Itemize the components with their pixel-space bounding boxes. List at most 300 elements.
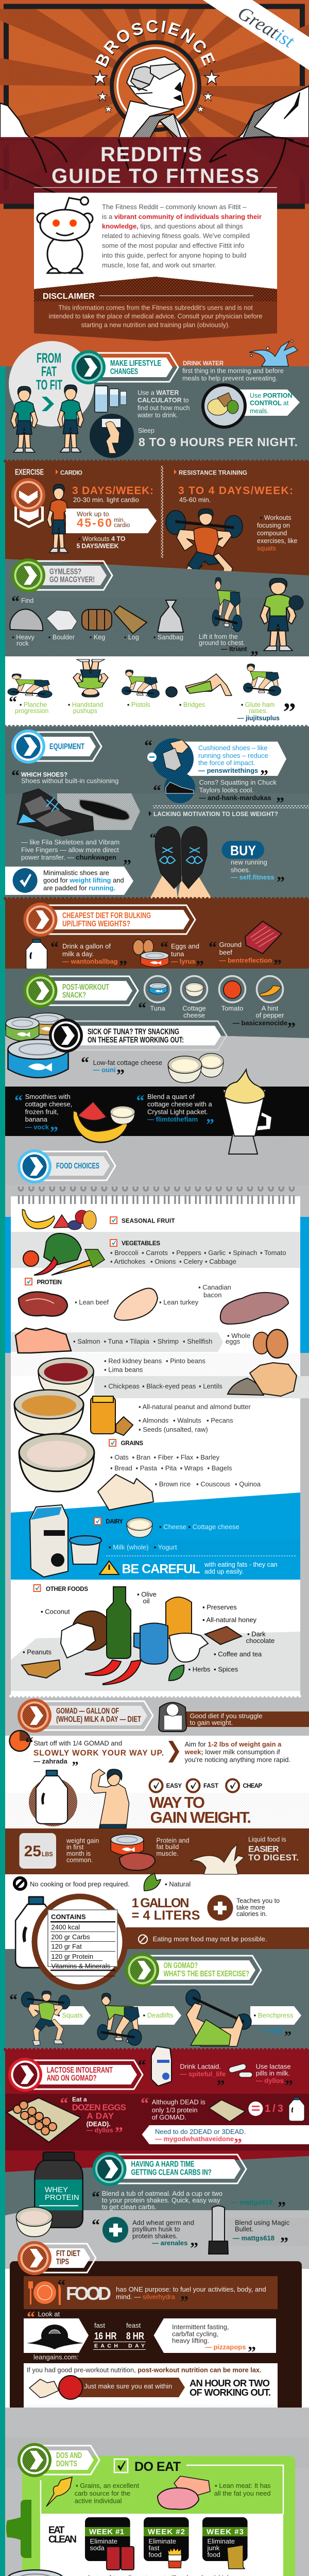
vegetables: ▪ Cabbage [205, 1258, 236, 1265]
quote: lactase pills: — dyllos [256, 2077, 284, 2084]
section: gymless [5, 558, 309, 666]
legumes text: ▪ Red kidney beans [104, 1357, 162, 1365]
week 2: fast [148, 2544, 160, 2552]
quote: wheat germ: “ [92, 2215, 100, 2234]
fila text: — like Fila Skeletoes and Vibram [21, 838, 119, 846]
section: dos and don'ts [5, 2408, 309, 2576]
callout: intermittent fasting: heavy lifting. [172, 2336, 209, 2344]
icon: whey tub: PROTEIN [45, 2193, 79, 2202]
fast feast: EACH [94, 2343, 118, 2349]
teaches you: calories in. [236, 1910, 267, 1918]
seafood row: ▪ Shellfish [183, 1337, 212, 1345]
cardio details: 20-30 min. light cardio [73, 496, 139, 504]
grains: ▪ Quinoa [235, 1480, 261, 1488]
exercise options: ▪ Squats [58, 2011, 83, 2019]
quote: smoothies: “ [14, 1091, 23, 1110]
icon: coconut [61, 1611, 111, 1658]
quote: low-fat cottage cheese: ” [116, 1065, 125, 1084]
icon: kettlebell figure [260, 579, 303, 651]
cushioned callout: ” [260, 766, 268, 785]
band: 25 lbs: TO DIGEST. [248, 1853, 299, 1862]
quote: lactaid: Drink Lactaid. [180, 2063, 221, 2071]
quote: dead is a third: Although DEAD is [152, 2098, 205, 2106]
portion control [203, 385, 300, 427]
other foods labels: ▪ Preserves [202, 1603, 237, 1611]
legumes text: ▪ Black-eyed peas [142, 1382, 196, 1390]
icon: rock [10, 609, 43, 631]
eat clean: CLEAN [48, 2534, 77, 2545]
icon: blender [223, 1070, 272, 1154]
quote: lift: — Itriant [221, 646, 248, 653]
seafood row: ▪ Shrimp [153, 1337, 179, 1345]
quote: crystal light: — flimtotheflam [147, 1115, 198, 1123]
greatist ribbon [203, 0, 309, 70]
vegetables: ▪ Onions [150, 1258, 176, 1265]
band: 25 lbs: in first [66, 1843, 84, 1851]
quote: dozen eggs: DOZEN EGGS [72, 2103, 126, 2112]
quote: ground beef: ” [273, 956, 282, 974]
other foods labels: ▪ Peanuts [23, 1648, 52, 1656]
grains do: ▪ Grains, an excellent [76, 2482, 140, 2489]
resistance details: squats [257, 545, 276, 552]
vegetables [23, 1233, 286, 1275]
exercise labels [15, 468, 247, 477]
quote: slowly work up: SLOWLY WORK YOUR WAY UP. [33, 1749, 164, 1757]
nutrition label magnifier: 200 gr Carbs [52, 1933, 90, 1941]
header poster [0, 0, 309, 366]
snack labels: Tomato [221, 1005, 243, 1012]
greatist ribbon: Greatist [234, 3, 299, 53]
fast feast: DAY [128, 2343, 145, 2349]
cardio details: ▪ Workouts 4 TO [78, 535, 126, 543]
quote: slowly work up: Start off with 1/4 GOMAD and [33, 1739, 122, 1747]
icon: nuts [228, 1363, 297, 1396]
gear labels: ▪ Boulder [48, 634, 75, 641]
quote: crystal light: Crystal Light packet. [147, 1108, 208, 1116]
dairy: ▪ Yogurt [153, 1544, 177, 1551]
quote: magic bullet: Bullet. [235, 2225, 253, 2233]
water calculator text: water to drink. [137, 412, 178, 419]
be careful warning: add up easily. [204, 1568, 244, 1575]
cardio details: Work up to [77, 510, 109, 518]
legumes text: ▪ Lima beans [104, 1366, 143, 1374]
quote: wheat germ: psyllium husk to [132, 2225, 180, 2233]
snack labels [138, 998, 296, 1037]
heading: best exercise: WHAT'S THE BEST EXERCISE? [164, 1970, 249, 1978]
other foods: OTHER FOODS [46, 1586, 88, 1592]
fast feast [93, 2321, 146, 2350]
icon: peppers [85, 1660, 141, 1685]
heading: dos and donts: DOS AND [56, 2451, 82, 2460]
banner: good diet [159, 1702, 309, 1732]
water calculator text: CALCULATOR to [138, 397, 189, 404]
dark arm outlines [0, 137, 309, 204]
quote: magic bullet: ” [280, 2233, 288, 2252]
cushioned callout [144, 736, 286, 785]
way to gain weight: GAIN WEIGHT. [150, 1808, 251, 1826]
stars [92, 70, 219, 112]
quote: smoothies: frozen fruit, [25, 1108, 59, 1116]
title circle [9, 341, 94, 427]
protein [19, 1278, 288, 1324]
quote: wheat germ: ” [190, 2239, 198, 2257]
seasonal fruit [22, 1210, 175, 1230]
heading: fit diet: TIPS [56, 2258, 69, 2266]
section: sick of tuna [5, 1013, 309, 1217]
grains: ▪ Bagels [207, 1464, 232, 1472]
minimalist callout [5, 867, 133, 895]
intro text: knowledge, tips, and questions about all things [102, 223, 243, 230]
snack labels: ” [287, 1019, 296, 1037]
icon: bread [29, 2379, 59, 2398]
heading: gymless [11, 558, 112, 592]
disclaimer: DISCLAIMER [43, 292, 95, 301]
fast feast: 16 HR [94, 2331, 117, 2342]
eat clean [48, 2525, 77, 2545]
band: 25 lbs: month is [66, 1850, 91, 1857]
cardio details: 45-60 [77, 516, 112, 530]
quote: magic bullet: — mattgs618 [233, 2234, 274, 2242]
quote: crystal light: “ [136, 1091, 144, 1110]
heading: sick of tuna: ON THESE AFTER WORKING OUT: [88, 1036, 184, 1045]
snack labels: Cottage [182, 1005, 206, 1012]
quote: smoothies: cottage cheese, [25, 1100, 72, 1108]
resistance details: 45-60 min. [179, 496, 211, 504]
band: eating more food [126, 1927, 309, 1950]
quote: wheat germ: Add wheat germ and [132, 2218, 194, 2227]
bodyweight labels: “ [9, 692, 17, 711]
cardio details: cardio [114, 522, 130, 529]
nutrition label magnifier: Vitamins & Minerals [52, 1962, 111, 1970]
quote: dead is a third: “ [141, 2094, 149, 2112]
fast feast: fast [94, 2321, 105, 2329]
quote: lift [199, 633, 259, 666]
bowls [14, 1358, 94, 1492]
other foods labels: oil [143, 1597, 150, 1605]
band: food purpose: “ [57, 2276, 65, 2294]
fila text [21, 838, 131, 874]
bodyweight labels: ▪ Glute ham [241, 701, 275, 708]
intro text [102, 203, 262, 269]
chuck taylors quote: — and-hank-mardukas [199, 794, 271, 802]
grains: ▪ Pasta [136, 1464, 158, 1472]
band: 25 lbs: LBS [42, 1851, 53, 1858]
nutrition label magnifier [35, 1896, 125, 1987]
section: fit diet tips [5, 2241, 309, 2437]
week 3: junk [207, 2544, 220, 2552]
be careful warning: with eating fats - they can [204, 1561, 278, 1568]
heading: best exercise [125, 1953, 261, 1987]
minimalist callout: are padded for running. [43, 884, 115, 892]
bodyweight labels: ▪ Planche [20, 701, 47, 708]
dairy [30, 1505, 297, 1577]
quote: smoothies: — vock [25, 1123, 49, 1131]
cushioned callout: “ [144, 736, 152, 755]
nuts text: ▪ Seeds (unsalted, raw) [139, 1426, 208, 1433]
portion control: meals. [250, 408, 269, 415]
heading: fit diet: FIT DIET [56, 2249, 80, 2258]
band: 25 lbs: fat build [157, 1843, 179, 1851]
quote: lift: ground to chest. [199, 639, 245, 647]
quote: ground beef: Ground [219, 941, 242, 948]
bodyweight labels: — jiujitsuplus [237, 715, 280, 722]
resistance details: 3 TO 4 DAYS/WEEK: [178, 485, 293, 497]
section: cheapest diet [5, 899, 309, 975]
week 1: Eliminate [90, 2537, 117, 2545]
icon: planche [8, 674, 52, 698]
section: gomad heading: (WHOLE) MILK A DAY — DIET [56, 1715, 141, 1724]
disclaimer: This information comes from the Fitness subreddit's users and is not [58, 304, 253, 311]
water calculator text [137, 389, 190, 419]
section: from fat to fit [5, 340, 309, 461]
heading: sick of tuna [49, 1019, 227, 1053]
nutrition label magnifier: CONTAINS [51, 1913, 86, 1921]
icon: log [114, 606, 147, 634]
aim text: you're noticing anything more rapid. [185, 1756, 290, 1764]
section: exercise [5, 461, 309, 595]
heading: lactose: LACTOSE INTOLERANT [47, 2066, 113, 2075]
quote: oatmeal [92, 2188, 286, 2216]
other foods labels: ▪ Spices [214, 1665, 238, 1673]
week 1 [85, 2517, 134, 2570]
grains do: active individual [75, 2497, 122, 2505]
seafood row: ▪ Whole [227, 1332, 250, 1340]
lean meat do: ▪ Lean meat: It has [215, 2482, 271, 2489]
heading: equipment [11, 730, 101, 764]
other foods labels: ▪ Coconut [41, 1607, 70, 1616]
lean meat do: all the fat you need [214, 2489, 270, 2497]
icon: squat [21, 1991, 70, 2046]
water calculator text: Use a WATER [138, 389, 179, 397]
bodyweight labels [9, 692, 296, 726]
bodyweight labels: ▪ Bridges [179, 701, 205, 708]
quote: milk: — wantonballbag [62, 958, 118, 965]
icon: boulder [46, 610, 77, 631]
section: lactose [5, 2046, 309, 2172]
one gallon: = 4 LITERS [132, 1908, 200, 1923]
legumes text [104, 1357, 222, 1390]
icon: jug with hatch [29, 1770, 77, 1826]
icon: pistols [122, 670, 159, 698]
which shoes text: “ [11, 766, 20, 785]
title circle: TO FIT [36, 377, 62, 393]
icon: honey jar [166, 1597, 192, 1638]
icon: water splash [249, 340, 298, 366]
dairy: ▪ Cottage cheese [188, 1523, 239, 1531]
sleep text [138, 427, 298, 449]
one gallon [132, 1896, 200, 1923]
icon: sleeping man [90, 414, 134, 458]
band: 25 lbs: EASIER [248, 1844, 279, 1854]
seafood row: ▪ Salmon [73, 1337, 100, 1345]
cushioned callout: the force of impact. [198, 759, 255, 767]
icon: handstand [73, 659, 108, 697]
section: gomad exercises [5, 1896, 309, 2049]
quote: crystal light: ” [206, 1115, 214, 1133]
protein: bacon [203, 1291, 221, 1299]
gear labels: rock [16, 640, 29, 647]
dairy: DAIRY [106, 1519, 123, 1525]
leangains: “ [27, 2308, 35, 2326]
intro text: related to achieving fitness goals. We've compiled [102, 232, 250, 240]
callout: 2dead: Need to do 2DEAD or 3DEAD. [155, 2128, 246, 2136]
quote: crystal light: Blend a quart of [147, 1093, 195, 1100]
band: 25 lbs: muscle. [157, 1850, 179, 1857]
icon: tuna and chicken [7, 2570, 85, 2576]
emblem ring [112, 42, 199, 130]
snack labels: A hint [262, 1005, 279, 1012]
icon: deadlift [97, 1993, 142, 2045]
icon: magic bullet [209, 2206, 228, 2254]
heading: make lifestyle changes: CHANGES [110, 367, 138, 376]
quote: lactaid [138, 2046, 226, 2095]
other foods labels: ▪ Coffee and tea [214, 1650, 262, 1658]
band: food purpose: ” [180, 2292, 188, 2311]
eat clean: EAT [48, 2525, 65, 2536]
quote: crystal light: cottage cheese with a [147, 1100, 213, 1108]
protein: PROTEIN [37, 1280, 62, 1286]
nuts text: ▪ Pecans [207, 1417, 233, 1425]
no cooking [14, 1878, 130, 1889]
quote: eggs and tuna: “ [160, 938, 168, 956]
quote: oatmeal: — mattgs618 [231, 2198, 272, 2206]
quote: dozen eggs: Eat a [72, 2096, 87, 2103]
quote: find: “ [11, 592, 20, 611]
which shoes text: Shoes without built-in cushioning [21, 777, 118, 785]
white panel: pre-workout: AN HOUR OR TWO [190, 2378, 270, 2388]
grains [98, 1439, 261, 1510]
quote: eggs and tuna: tuna [171, 950, 184, 958]
banner: good diet: Good diet if you struggle [190, 1712, 262, 1720]
vegetables: ▪ Peppers [172, 1249, 201, 1257]
quote: lactase pills: Use lactase [256, 2063, 291, 2071]
vegetables: ▪ Garlic [204, 1249, 226, 1257]
quote: dozen eggs: (DEAD). [87, 2121, 111, 2128]
band: 25 lbs: 25 [24, 1843, 41, 1860]
resistance details: focusing on [257, 522, 290, 529]
quote: dead is a third: only 1/3 protein [152, 2106, 198, 2114]
quote: smoothies: banana [25, 1115, 48, 1123]
heading: best exercise: ON GOMAD? [164, 1961, 198, 1970]
week 3: WEEK #3 [207, 2528, 244, 2536]
quote: eggs and tuna: — lyrus [171, 958, 196, 965]
way to gain weight [149, 1793, 251, 1826]
do eat title: DO EAT [134, 2460, 181, 2474]
bodyweight labels: progression [15, 707, 48, 715]
heading: clean carbs: HAVING A HARD TIME [131, 2160, 195, 2169]
heading: gymless: GYMLESS? [49, 568, 81, 576]
chuck taylors quote: ” [276, 793, 284, 812]
callout: intermittent fasting: — pizzapops [205, 2343, 246, 2351]
buy new shoes: shoes. [231, 866, 250, 874]
grains do [46, 2477, 140, 2506]
icon: tuna and steak [111, 1834, 155, 1870]
cushioned callout: running shoes – reduce [198, 752, 268, 759]
icon: running shoes top view [149, 826, 212, 899]
resistance details: exercises, like [257, 537, 298, 545]
other foods labels: ▪ Herbs [188, 1665, 211, 1673]
buy new shoes: ” [277, 873, 285, 891]
other foods labels [23, 1590, 274, 1673]
be careful warning [99, 1561, 278, 1577]
icon: runner [47, 484, 71, 552]
icon: bench [186, 1990, 251, 2046]
cardio details: 5 DAYS/WEEK [76, 543, 118, 550]
heading: cheapest diet: CHEAPEST DIET FOR BULKING [62, 911, 151, 920]
portion control: CONTROL at [250, 400, 289, 407]
quote: dead is a third: of GOMAD. [152, 2113, 186, 2121]
quote: ground beef: — bentreflection [219, 956, 272, 964]
snack labels: cheese [183, 1011, 205, 1019]
drink water text: first thing in the morning and before [182, 367, 284, 375]
drink water text [182, 361, 284, 382]
disclaimer: starting a new nutrition and training plan (obviously). [81, 321, 230, 329]
gear labels: ▪ Sandbag [153, 634, 183, 641]
which shoes text [11, 766, 118, 785]
quote: lactaid: ” [217, 2076, 225, 2095]
white panel: pre-workout: OF WORKING OUT. [190, 2387, 271, 2398]
nutrition label magnifier: 2400 kcal [52, 1923, 80, 1931]
vegetables: ▪ Broccoli [110, 1249, 139, 1257]
quote: slowly work up: — zahrada [33, 1757, 68, 1765]
exercise labels: RESISTANCE TRAINING [179, 470, 247, 476]
teaches you [207, 1895, 280, 1921]
minimalist callout: good for weight lifting and [43, 876, 124, 884]
callout: 2dead: — mygodwhathaveidone [155, 2135, 234, 2143]
vegetables: ▪ Celery [179, 1258, 203, 1265]
quote: lift: ” [250, 647, 259, 666]
quote: dead is a third [141, 2094, 304, 2122]
icon: bridges [166, 674, 232, 697]
band: 25 lbs: Protein and [157, 1837, 189, 1844]
aim text: week; lower milk consumption if [184, 1748, 280, 1756]
section: bodyweight [5, 656, 309, 726]
aim text [184, 1740, 290, 1764]
quote: find: Find [21, 597, 33, 604]
disclaimer: intended to take the place of medical advice. Consult your physician before [49, 313, 262, 320]
seafood row: ▪ Tuna [104, 1337, 123, 1345]
bodyweight labels: ▪ Handstand [68, 701, 103, 708]
callout: 2dead: ” [234, 2134, 242, 2153]
heading: dos and donts [18, 2443, 99, 2477]
legumes text: ▪ Lentils [199, 1382, 222, 1390]
section: food list paper [5, 1187, 309, 1696]
quote: find [11, 592, 33, 611]
easy fast cheap: CHEAP [243, 1783, 262, 1789]
quote: milk: milk a day. [62, 950, 94, 958]
quote: oatmeal: ” [278, 2198, 286, 2216]
icon: cup [169, 1633, 208, 1662]
icon: bent lift figure [212, 578, 242, 632]
quote: oatmeal: to your protein shakes. Quick, easy way [102, 2196, 220, 2204]
dairy: ▪ Milk (whole) [109, 1544, 149, 1551]
quote: low-fat cottage cheese: Low-fat cottage cheese [93, 1059, 162, 1066]
band: food purpose [24, 2276, 278, 2311]
icon: whey tub [16, 2152, 83, 2236]
vegetables: ▪ Spinach [229, 1249, 257, 1257]
heading: food choices [18, 1149, 115, 1183]
band: 25 lbs [5, 1828, 309, 1874]
natural [144, 1873, 191, 1891]
icon: herbs [169, 1665, 184, 1681]
grains: ▪ Oats [110, 1453, 129, 1461]
quote: smoothies: Smoothies with [25, 1093, 71, 1100]
snack labels: “ [138, 998, 146, 1017]
week 1: WEEK #1 [89, 2528, 124, 2536]
easy fast cheap: EASY [166, 1783, 182, 1789]
heading: food choices: FOOD CHOICES [56, 1162, 99, 1171]
quote: eggs and tuna: Eggs and [171, 942, 199, 950]
